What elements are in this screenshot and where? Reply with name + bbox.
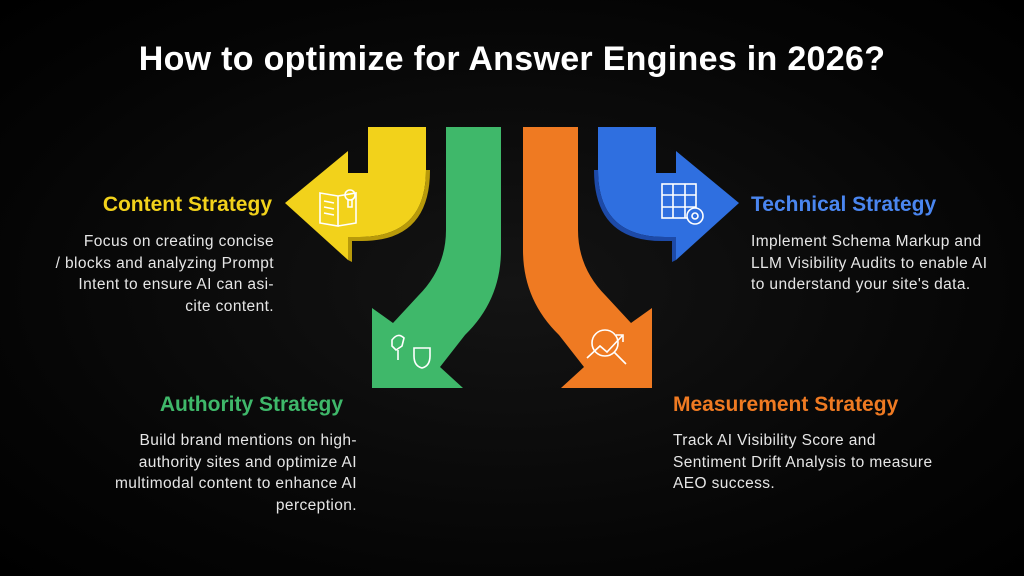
- text: measurement strategy: Track AI Visibility Score and: [673, 432, 876, 449]
- text: technical strategy: to understand your site's data.: [751, 276, 971, 293]
- text: technical strategy: Technical Strategy: [751, 193, 936, 216]
- arrow: blue technical: [594, 127, 739, 262]
- text: authority strategy: [115, 393, 357, 514]
- text: content strategy: / blocks and analyzing Prompt: [56, 254, 274, 272]
- text: measurement strategy: [673, 393, 933, 492]
- icon: grid gear: [662, 184, 703, 224]
- text: content strategy: cite content.: [185, 298, 274, 314]
- text: authority strategy: multimodal content to enhance AI: [115, 475, 357, 492]
- text: measurement strategy: AEO success.: [673, 475, 775, 492]
- text: measurement strategy: Sentiment Drift Analysis to measure: [673, 454, 933, 470]
- text: content strategy: Focus on creating concise: [84, 233, 274, 250]
- text: technical strategy: LLM Visibility Audits to enable AI: [751, 254, 987, 272]
- arrow: yellow content: [285, 127, 430, 262]
- text: technical strategy: [751, 193, 987, 293]
- title: How to optimize for Answer Engines in 2026?: [139, 40, 885, 78]
- text: content strategy: [56, 193, 274, 314]
- text: authority strategy: Authority Strategy: [160, 393, 343, 416]
- arrow: green authority: [372, 127, 501, 388]
- arrow: orange measurement: [523, 127, 652, 388]
- text: content strategy: Content Strategy: [103, 193, 272, 216]
- text: content strategy: Intent to ensure AI can asi-: [78, 276, 274, 293]
- text: authority strategy: Build brand mentions on high-: [139, 432, 357, 449]
- text: authority strategy: authority sites and optimize AI: [139, 454, 357, 470]
- text: technical strategy: Implement Schema Markup and: [751, 233, 982, 250]
- icon: chart magnifier: [587, 330, 626, 364]
- text: measurement strategy: Measurement Strategy: [673, 393, 898, 416]
- text: authority strategy: perception.: [276, 496, 357, 514]
- icon: authority: [392, 335, 430, 368]
- icon: book with bulb: [320, 190, 356, 226]
